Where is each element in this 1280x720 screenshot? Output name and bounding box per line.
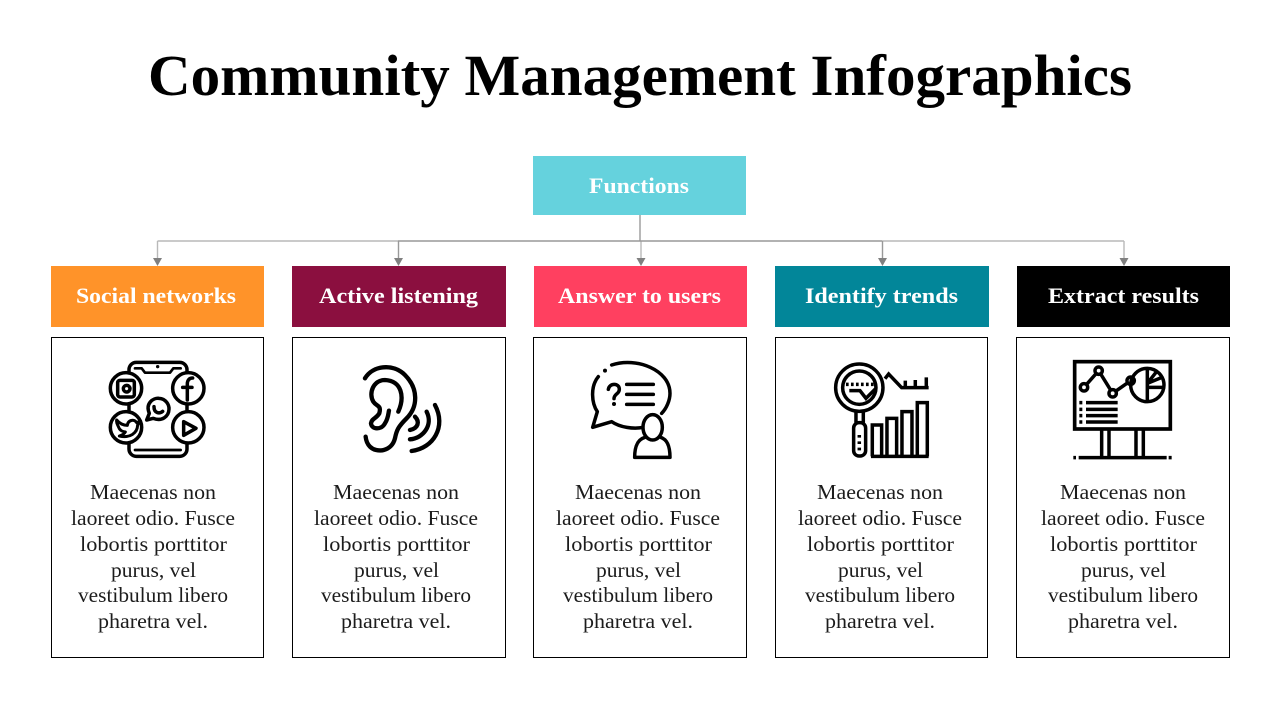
icon: speech bubble with question and user (593, 363, 670, 457)
body text: lobortis porttitor (80, 532, 227, 556)
header: Identify trends: Identify trends (805, 283, 958, 308)
body text (556, 480, 720, 633)
body text: pharetra vel. (583, 609, 693, 633)
body text: pharetra vel. (341, 609, 451, 633)
body text: vestibulum libero (321, 583, 471, 607)
header: Social networks (51, 266, 264, 327)
body text: laoreet odio. Fusce (71, 506, 235, 530)
body text: purus, vel (838, 558, 923, 582)
body text (71, 480, 235, 633)
body text: laoreet odio. Fusce (1041, 506, 1205, 530)
body text: lobortis porttitor (323, 532, 470, 556)
body text: laoreet odio. Fusce (314, 506, 478, 530)
body text: Maecenas non (90, 480, 217, 504)
header: Answer to users: Answer to users (558, 283, 721, 308)
body text: Maecenas non (333, 480, 460, 504)
body text: purus, vel (596, 558, 681, 582)
header: Social networks: Social networks (76, 283, 236, 308)
body text: laoreet odio. Fusce (556, 506, 720, 530)
title: Community Management Infographics (148, 43, 1132, 108)
body text (314, 480, 478, 633)
body text: vestibulum libero (1048, 583, 1198, 607)
body text: Maecenas non (1060, 480, 1187, 504)
body text: pharetra vel. (825, 609, 935, 633)
body text: purus, vel (354, 558, 439, 582)
root box: Functions: Functions (589, 173, 689, 198)
body text: laoreet odio. Fusce (798, 506, 962, 530)
header: Active listening: Active listening (319, 283, 478, 308)
root box: Functions (533, 156, 746, 215)
body text: lobortis porttitor (807, 532, 954, 556)
panel: social networks (52, 338, 264, 658)
body text (1041, 480, 1205, 633)
icon: ear with sound waves (365, 367, 439, 451)
body text: vestibulum libero (805, 583, 955, 607)
body text: Maecenas non (817, 480, 944, 504)
icon: phone with social media badges (110, 362, 204, 456)
body text: pharetra vel. (1068, 609, 1178, 633)
icon: magnifier with bar chart (836, 364, 929, 456)
body text (798, 480, 962, 633)
header: Identify trends (775, 266, 989, 327)
panel: active listening (292, 338, 506, 658)
panel: answer to users (534, 338, 746, 658)
panel: identify trends (776, 338, 988, 658)
body text: lobortis porttitor (1050, 532, 1197, 556)
header: Answer to users (534, 266, 747, 327)
header: Extract results (1017, 266, 1230, 327)
body text: Maecenas non (575, 480, 702, 504)
body text: purus, vel (111, 558, 196, 582)
connector arrows (153, 215, 1128, 266)
header: Extract results: Extract results (1048, 283, 1199, 308)
body text: lobortis porttitor (565, 532, 712, 556)
icon: presentation board with charts (1073, 362, 1172, 458)
panel: extract results (1016, 338, 1230, 658)
body text: vestibulum libero (563, 583, 713, 607)
header: Active listening (292, 266, 506, 327)
body text: pharetra vel. (98, 609, 208, 633)
body text: purus, vel (1081, 558, 1166, 582)
body text: vestibulum libero (78, 583, 228, 607)
